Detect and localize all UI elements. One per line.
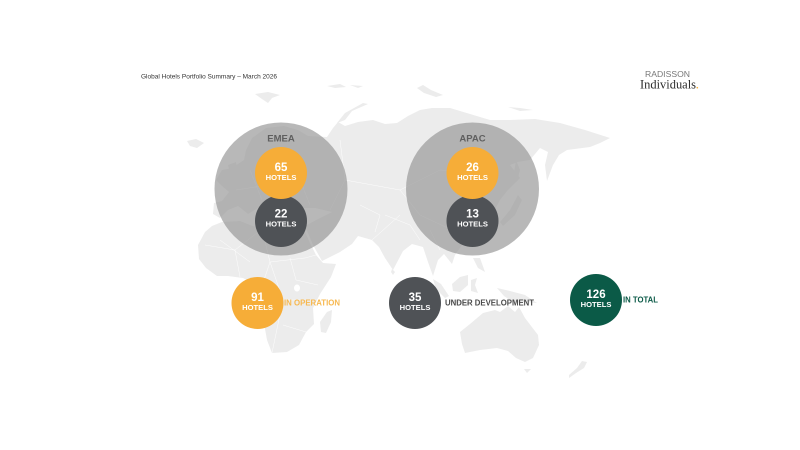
in operation APAC: 26 hotels: 26 (466, 162, 479, 174)
panel: EMEA (214, 122, 348, 256)
title: Global Hotels Portfolio Summary – March 2026 (141, 74, 277, 80)
legend: under development total: UNDER DEVELOPMENT (445, 298, 534, 308)
legend: total portfolio: HOTELS (581, 300, 611, 309)
legend: total portfolio: 126 (586, 289, 606, 301)
in operation APAC: 26 hotels (446, 147, 498, 199)
legend: in operation total: IN OPERATION (284, 298, 340, 308)
legend: in operation total: HOTELS (242, 303, 273, 312)
legend: in operation total: 91 (251, 292, 264, 304)
logo: Radisson Individuals (640, 70, 698, 92)
logo: Radisson Individuals: Individuals (640, 78, 696, 92)
under development EMEA: 22 hotels: 22 (275, 208, 287, 220)
in operation APAC: 26 hotels: HOTELS (457, 173, 488, 182)
in operation EMEA: 65 hotels: 65 (275, 162, 288, 174)
legend: in operation total (232, 277, 340, 329)
panel: EMEA: EMEA (267, 134, 295, 144)
panel: APAC (406, 122, 539, 256)
legend: under development total: 35 (409, 292, 422, 304)
logo: Radisson Individuals: RADISSON (645, 70, 690, 79)
under development EMEA: 22 hotels (255, 195, 307, 247)
in operation EMEA: 65 hotels (255, 147, 307, 199)
legend: total portfolio: IN TOTAL (623, 296, 658, 304)
in operation EMEA: 65 hotels: HOTELS (266, 173, 296, 182)
under development APAC: 13 hotels: HOTELS (457, 220, 488, 228)
legend: under development total (389, 277, 534, 329)
panel: APAC: APAC (459, 134, 486, 144)
under development APAC: 13 hotels: 13 (466, 208, 479, 220)
legend: total portfolio (570, 274, 658, 326)
under development APAC: 13 hotels (446, 195, 498, 247)
world map background (187, 84, 610, 378)
under development EMEA: 22 hotels: HOTELS (266, 220, 296, 228)
legend: under development total: HOTELS (400, 303, 430, 312)
